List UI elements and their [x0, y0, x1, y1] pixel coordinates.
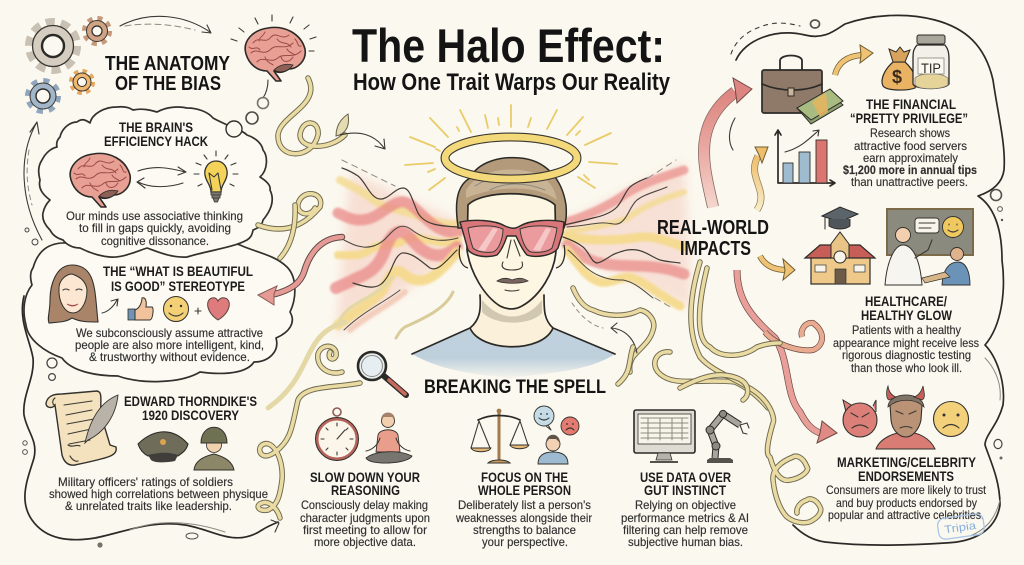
heading: marketing celebrity endorsements: MARKETING/CELEBRITY	[837, 454, 977, 470]
panel: the financial pretty privilege	[762, 35, 977, 189]
icon: monitor with spreadsheet	[634, 410, 695, 463]
icon: woman	[48, 265, 98, 323]
heading: slow down your reasoning	[310, 469, 420, 498]
text: use data body: subjective human bias.	[628, 535, 743, 549]
icon: money bag	[882, 47, 916, 90]
text: healthcare body: rigorous diagnostic testing	[842, 348, 971, 362]
heading: the financial pretty privilege	[850, 96, 968, 126]
arrow: pink to marketing	[737, 270, 837, 443]
text: focus body: your perspective.	[482, 535, 568, 549]
panel: the brain's efficiency hack	[39, 107, 272, 257]
heading: slow down your reasoning: SLOW DOWN YOUR	[310, 469, 420, 485]
panel: marketing and celebrity endorsements	[826, 386, 987, 540]
illustration: man with halo and rose glasses	[405, 105, 617, 378]
icon: tip jar: TIP	[921, 61, 941, 76]
face	[467, 194, 556, 309]
icon: tip jar	[913, 35, 949, 89]
arrow: pink up to briefcase	[704, 78, 752, 207]
icon: thumbs up	[128, 298, 153, 320]
icon: glasses	[460, 220, 564, 257]
icon: light bulb	[194, 151, 238, 202]
text: thorndike body: & unrelated traits like leadership.	[65, 499, 232, 513]
text: what is beautiful body: people are also more intelligent, kind,	[75, 338, 264, 352]
text: use data body: Relying on objective	[635, 498, 736, 512]
text: slow down body	[300, 498, 430, 549]
arrow: up the left side	[24, 122, 42, 245]
heading: the anatomy of the bias: THE ANATOMY	[105, 53, 231, 75]
text: brain's efficiency hack body: to fill in gaps quickly, avoiding	[79, 221, 231, 235]
icon: scroll and quill	[46, 391, 118, 465]
heading: healthcare healthy glow: HEALTHY GLOW	[861, 307, 953, 323]
heading: the brain's efficiency hack: THE BRAIN'S	[119, 119, 193, 135]
text: brain's efficiency hack body	[66, 209, 243, 248]
watermark stamp: Tripia	[943, 520, 978, 536]
column: focus on the whole person	[455, 406, 592, 549]
heading: breaking the spell: BREAKING THE SPELL	[424, 376, 606, 398]
panel: what is beautiful is good	[24, 235, 295, 382]
hair back	[456, 158, 566, 228]
panel: healthcare	[805, 207, 979, 375]
text: slow down body: Consciously delay making	[301, 498, 428, 512]
heading: the brain's efficiency hack	[104, 119, 208, 149]
icon: smiley	[164, 296, 188, 322]
text: financial body: attractive food servers	[854, 139, 967, 153]
heading: what is beautiful is good	[103, 263, 253, 294]
heading: edward thorndike's discovery: 1920 DISCOVERY	[142, 407, 240, 423]
arrow: gears to brain	[120, 16, 211, 33]
heading: edward thorndike's discovery: EDWARD THORNDIKE'S	[124, 393, 257, 409]
text: marketing body: and buy products endorsed by	[836, 496, 977, 510]
heading: focus on the whole person	[478, 469, 571, 498]
icon: magnifying glass	[358, 352, 406, 395]
text: slow down body: character judgments upon	[300, 511, 430, 525]
column: use data	[621, 410, 749, 549]
heading: what is beautiful is good: THE “WHAT IS BEAUTIFUL	[103, 263, 253, 279]
heading: the anatomy of the bias	[105, 53, 231, 95]
illustration: beams left of glasses	[336, 160, 460, 338]
icon: angry devil face	[843, 400, 877, 437]
heading: real-world impacts: IMPACTS	[680, 238, 751, 260]
text: slow down body: more objective data.	[314, 535, 416, 549]
text: healthcare body: than those who look ill.	[851, 361, 962, 375]
arrow: orange to school	[760, 256, 795, 280]
heading: use data over gut instinct: USE DATA OVER	[640, 469, 731, 485]
heading: the anatomy of the bias: OF THE BIAS	[115, 73, 221, 95]
panel: edward thorndike's discovery	[22, 296, 279, 548]
ribbons: yellow	[680, 262, 821, 523]
title: The Halo Effect:	[352, 19, 665, 72]
text: financial body	[843, 126, 977, 189]
text: financial body: Research shows	[870, 126, 950, 140]
icon: bar chart	[775, 130, 835, 186]
arrows: impact ribbons	[680, 45, 873, 523]
icon: horned man	[876, 386, 935, 449]
text: focus body: Deliberately list a person's	[458, 498, 591, 512]
heading: focus on the whole person: WHOLE PERSON	[478, 482, 571, 498]
title	[352, 19, 671, 96]
text: financial body: than unattractive peers.	[851, 175, 968, 189]
text: use data body: filtering can help remove	[623, 523, 748, 537]
icon: scales	[471, 409, 529, 463]
text: brain's efficiency hack body: cognitive dissonance.	[101, 234, 209, 248]
icon: soldier	[194, 427, 234, 470]
text: use data body: performance metrics & AI	[621, 511, 749, 525]
heading: marketing celebrity endorsements	[837, 454, 977, 484]
text: thorndike body: showed high correlations between physique	[49, 487, 268, 501]
heading: slow down your reasoning: REASONING	[331, 482, 400, 498]
text: marketing body: Consumers are more likely to trust	[826, 483, 987, 497]
icon: glowing brain	[231, 15, 316, 124]
icon: stopwatch and meditating person	[316, 408, 412, 463]
ribbons: flowing lines below right of the man	[572, 288, 768, 408]
heading: the financial pretty privilege: “PRETTY PRIVILEGE”	[850, 110, 968, 126]
heading: edward thorndike's discovery	[124, 393, 257, 423]
icon: person with speech bubbles	[534, 406, 579, 464]
icon: officer cap	[138, 432, 188, 462]
text: focus body: weaknesses alongside their	[455, 511, 592, 525]
icon: halo and rays	[405, 105, 617, 190]
icon: briefcase	[762, 56, 822, 113]
text: brain's efficiency hack body: Our minds use associative thinking	[66, 209, 243, 223]
text: marketing body	[826, 483, 987, 522]
text: what is beautiful body: We subconsciously assume attractive	[76, 326, 263, 340]
text: thorndike body: Military officers' ratings of soldiers	[58, 475, 233, 489]
heading: use data over gut instinct: GUT INSTINCT	[644, 482, 726, 498]
heading: the brain's efficiency hack: EFFICIENCY HACK	[104, 133, 208, 149]
icon: gears	[28, 18, 110, 111]
icon: sad face	[934, 402, 968, 436]
text: what is beautiful body	[75, 326, 264, 364]
arrow: orange up to chart	[755, 147, 768, 210]
text: marketing body: popular and attractive celebrities.	[828, 508, 984, 522]
heading: focus on the whole person: FOCUS ON THE	[481, 469, 568, 485]
icon: money bag: $	[892, 67, 902, 87]
heading: the financial pretty privilege: THE FINANCIAL	[866, 96, 956, 112]
ears	[459, 245, 565, 268]
panel outline: real-world impacts	[729, 15, 1004, 545]
nose and lips	[502, 240, 523, 270]
arrows: two-way brain and bulb	[137, 167, 186, 188]
text: what is beautiful body: & trustworthy without evidence.	[89, 350, 250, 364]
heading: real-world impacts	[657, 217, 769, 260]
heading: what is beautiful is good: IS GOOD” STEREOTYPE	[111, 278, 245, 294]
icon: brain	[70, 153, 130, 207]
arrow: small	[102, 299, 118, 313]
heading: healthcare healthy glow: HEALTHCARE/	[865, 293, 947, 309]
icon: robot arm	[706, 410, 749, 463]
text: thorndike body	[49, 475, 268, 513]
text: healthcare body	[833, 323, 979, 375]
text: use data body	[621, 498, 749, 549]
heading: marketing celebrity endorsements: ENDORSEMENTS	[858, 468, 954, 484]
icon: cash stack	[797, 89, 843, 124]
icon: graduation cap and school	[805, 207, 875, 284]
column: slow down	[300, 408, 430, 549]
text: slow down body: first meeting to allow for	[303, 523, 427, 537]
text: focus body	[455, 498, 592, 549]
watermark stamp	[937, 513, 985, 540]
text: healthcare body: Patients with a healthy	[852, 323, 961, 337]
ribbons: flowing lines on the left	[258, 78, 392, 518]
illustration: beams right of glasses	[563, 160, 692, 308]
icon: plus	[195, 308, 201, 314]
icon: shirt	[412, 328, 615, 378]
heading: real-world impacts: REAL-WORLD	[657, 217, 769, 239]
text: financial body: $1,200 more in annual tips	[843, 163, 977, 177]
arrow: orange to tip jar	[835, 45, 873, 75]
neck	[469, 290, 553, 347]
icon: doctor at chalkboard	[885, 209, 973, 285]
text: financial body: earn approximately	[863, 151, 958, 165]
heading: use data over gut instinct	[640, 469, 731, 498]
panel: the anatomy of the bias	[22, 15, 316, 548]
text: healthcare body: appearance might receive less	[833, 336, 979, 350]
text: focus body: strengths to balance	[473, 523, 576, 537]
heading: healthcare healthy glow	[861, 293, 953, 323]
title: How One Trait Warps Our Reality	[353, 69, 671, 96]
icon: heart	[208, 298, 229, 320]
